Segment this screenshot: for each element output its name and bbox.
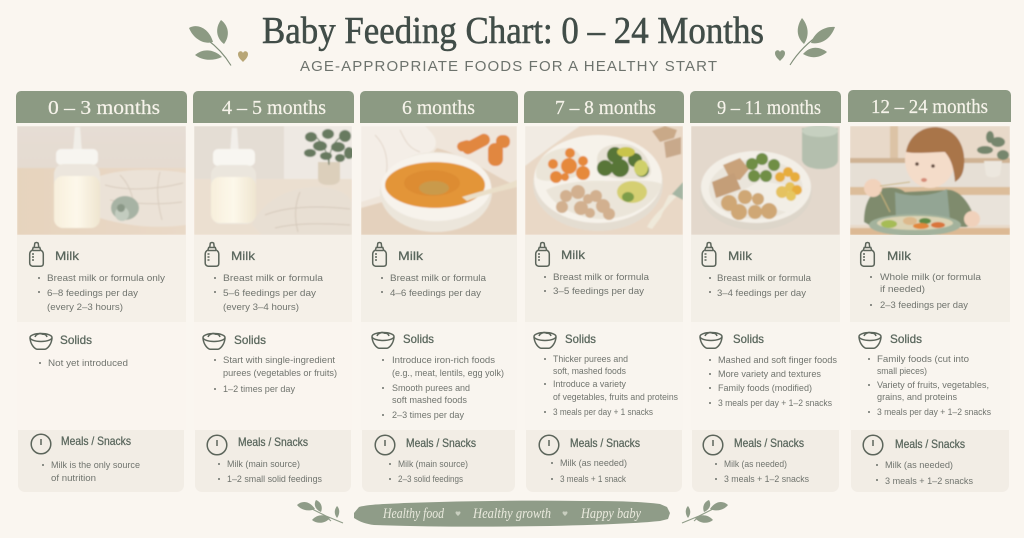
panel: milk	[525, 235, 683, 322]
heading: solids: Solids	[403, 332, 434, 346]
icon: clock	[539, 435, 559, 455]
heading: meals: Meals / Snacks	[895, 437, 965, 451]
heading: milk: Milk	[561, 248, 586, 262]
icon: bowl	[203, 333, 225, 349]
column: 12–24 months	[848, 90, 1011, 492]
header: 7–8 months	[524, 91, 684, 123]
list: meals	[42, 460, 140, 483]
list: meals: 3 meals + 1 snack	[560, 474, 626, 484]
list: milk: 3–5 feedings per day	[553, 286, 644, 296]
list: solids: soft, mashed foods	[553, 366, 626, 376]
icon: bowl	[30, 333, 52, 349]
heading: solids: Solids	[234, 333, 266, 347]
icon: bowl	[372, 332, 394, 348]
column: 9–11 months	[690, 91, 841, 492]
icon: clock	[703, 435, 723, 455]
icon: footer right sprig	[682, 500, 728, 523]
list: meals	[218, 459, 322, 484]
panel: meals and snacks	[362, 430, 515, 492]
list: solids	[709, 355, 837, 408]
list: solids	[868, 354, 991, 417]
header: 12–24 months: 12 – 24 months	[871, 96, 988, 118]
list: meals: Milk (main source)	[398, 459, 468, 469]
header: 9–11 months: 9 – 11 months	[717, 97, 821, 119]
icon: clock	[375, 435, 395, 455]
list: solids: Family foods (modified)	[718, 383, 812, 393]
subtitle: AGE-APPROPRIATE FOODS FOR A HEALTHY START	[300, 58, 717, 75]
panel: meals and snacks	[526, 430, 682, 492]
icon: bottle	[702, 242, 716, 266]
panel: solids	[525, 322, 683, 430]
column: 4–5 months	[193, 91, 354, 492]
panel: milk	[850, 235, 1010, 322]
list: meals	[876, 460, 973, 486]
list: milk: Breast milk or formula	[717, 273, 812, 283]
column: 6 months	[360, 91, 518, 492]
list: solids: grains, and proteins	[877, 392, 957, 402]
list: solids: of vegetables, fruits and proteins	[553, 392, 678, 402]
icon: bottle	[205, 242, 219, 266]
header: 9–11 months	[690, 91, 841, 123]
list: solids: 3 meals per day + 1–2 snacks	[877, 407, 991, 417]
column: 7–8 months	[524, 91, 684, 492]
footer banner	[354, 501, 670, 527]
header: 4–5 months	[193, 91, 354, 123]
list: solids	[382, 355, 504, 420]
heading: solids: Solids	[733, 332, 764, 346]
heading: milk: Milk	[55, 249, 80, 263]
panel: meals and snacks	[851, 430, 1009, 492]
list: solids: Smooth purees and	[392, 383, 470, 393]
list: meals	[551, 458, 627, 484]
list: solids	[544, 354, 678, 417]
heading: meals: Meals / Snacks	[238, 435, 308, 449]
list: milk: Breast milk or formula	[390, 273, 487, 283]
list: solids: purees (vegetables or fruits)	[223, 368, 337, 378]
header: 7–8 months: 7 – 8 months	[555, 97, 656, 119]
footer text: healthy food: Healthy food	[382, 506, 444, 522]
heading: meals: Meals / Snacks	[61, 434, 131, 448]
list: solids: 3 meals per day + 1–2 snacks	[718, 398, 832, 408]
icon: right leaf sprig with heart	[775, 18, 835, 65]
footer text: happy baby: Happy baby	[580, 506, 641, 522]
icon: bowl	[534, 332, 556, 348]
list: solids: Not yet introduced	[48, 358, 128, 368]
panel: meals and snacks	[692, 430, 839, 492]
icon: bowl	[700, 332, 722, 348]
icon: bottle	[861, 242, 874, 266]
list: solids: small pieces)	[877, 366, 927, 376]
panel: milk	[17, 235, 186, 322]
list: solids: 2–3 times per day	[392, 410, 464, 420]
list: milk: 5–6 feedings per day	[223, 288, 316, 298]
header: 6 months	[360, 91, 518, 123]
list: meals: 1–2 small solid feedings	[227, 474, 322, 484]
list: solids: soft mashed foods	[392, 395, 467, 405]
icon: bottle	[536, 242, 549, 266]
panel: solids	[850, 322, 1010, 430]
header: 12–24 months	[848, 90, 1011, 122]
list: solids: Introduce iron-rich foods	[392, 355, 495, 365]
list: meals	[389, 459, 468, 484]
list: solids: Start with single-ingredient	[223, 355, 335, 365]
photo: plate with finger foods and sage cup	[691, 125, 840, 235]
heading: meals: Meals / Snacks	[570, 436, 640, 450]
photo: bowl of carrot puree	[361, 126, 517, 235]
panel: solids	[361, 322, 517, 430]
icon: heart	[562, 511, 568, 516]
list: solids: (e.g., meat, lentils, egg yolk)	[392, 368, 504, 378]
icon: clock	[31, 434, 51, 454]
heading: milk: Milk	[728, 249, 753, 263]
list: milk: if needed)	[880, 284, 925, 294]
photo: toddler eating at table	[850, 126, 1010, 236]
list: meals: 2–3 solid feedings	[398, 474, 463, 484]
icon: clock	[863, 435, 883, 455]
list: meals: Milk (main source)	[227, 459, 300, 469]
list: meals: Milk (as needed)	[724, 459, 787, 469]
header: 0–3 months: 0 – 3 months	[48, 97, 160, 119]
list: meals: Milk is the only source	[51, 460, 140, 470]
panel: milk	[691, 235, 840, 322]
list: milk	[214, 273, 324, 312]
icon: heart	[456, 511, 460, 516]
list: milk: Breast milk or formula	[223, 273, 324, 283]
panel: solids	[691, 322, 840, 430]
panel: solids	[194, 322, 352, 430]
list: solids: Family foods (cut into	[877, 354, 969, 364]
list: meals: 3 meals + 1–2 snacks	[724, 474, 809, 484]
heading: meals: Meals / Snacks	[734, 436, 804, 450]
heading: solids: Solids	[565, 332, 596, 346]
list: meals: Milk (as needed)	[560, 458, 627, 468]
list: milk: (every 2–3 hours)	[47, 302, 123, 312]
list: milk: (every 3–4 hours)	[223, 302, 299, 312]
heading: solids: Solids	[890, 332, 922, 346]
footer text: healthy growth: Healthy growth	[472, 506, 551, 522]
list: solids: Variety of fruits, vegetables,	[877, 380, 989, 390]
list: meals	[715, 459, 809, 484]
photo: milk bottle with pacifier	[17, 126, 186, 235]
list: meals: 3 meals + 1–2 snacks	[885, 476, 973, 486]
list: milk	[38, 273, 165, 312]
heading: milk: Milk	[887, 249, 912, 263]
list: milk: Whole milk (or formula	[880, 272, 982, 282]
list: meals: Milk (as needed)	[885, 460, 953, 470]
list: solids	[214, 355, 337, 394]
list: milk	[544, 272, 650, 296]
list: solids: Mashed and soft finger foods	[718, 355, 837, 365]
list: milk	[709, 273, 812, 298]
title: Baby Feeding Chart: 0 – 24 Months	[262, 10, 764, 52]
photo: milk bottle with cloth and plant	[194, 126, 354, 235]
list: milk: Breast milk or formula only	[47, 273, 165, 283]
list: meals: of nutrition	[51, 473, 96, 483]
panel: solids	[17, 322, 186, 430]
list: solids: Thicker purees and	[553, 354, 628, 364]
list: solids: 3 meals per day + 1 snacks	[553, 407, 653, 417]
list: milk: 4–6 feedings per day	[390, 288, 481, 298]
list: milk: 6–8 feedings per day	[47, 288, 138, 298]
icon: bottle	[30, 242, 43, 266]
panel: meals and snacks	[195, 430, 351, 492]
list: milk: 2–3 feedings per day	[880, 300, 968, 310]
panel: milk	[194, 235, 352, 322]
list: milk: 3–4 feedings per day	[717, 288, 806, 298]
icon: left leaf sprig with heart	[189, 20, 248, 66]
icon: clock	[207, 435, 227, 455]
heading: solids: Solids	[60, 333, 92, 347]
header: 4–5 months: 4 – 5 months	[222, 97, 326, 119]
panel: milk	[361, 235, 517, 322]
list: solids: 1–2 times per day	[223, 384, 295, 394]
header: 6 months: 6 months	[402, 97, 475, 119]
list: milk	[870, 272, 982, 310]
header: 0–3 months	[16, 91, 187, 123]
photo: divided plate with vegetables and chicken	[525, 126, 683, 235]
list: solids: Introduce a variety	[553, 379, 626, 389]
list: milk	[381, 273, 487, 298]
heading: milk: Milk	[231, 249, 256, 263]
list: milk: Breast milk or formula	[553, 272, 650, 282]
icon: bottle	[373, 242, 386, 266]
icon: footer left sprig	[297, 500, 343, 523]
icon: bowl	[859, 332, 881, 348]
heading: milk: Milk	[398, 249, 424, 263]
panel: meals and snacks	[18, 430, 184, 492]
column: 0–3 months	[16, 91, 187, 492]
heading: meals: Meals / Snacks	[406, 436, 476, 450]
list: solids: More variety and textures	[718, 369, 821, 379]
